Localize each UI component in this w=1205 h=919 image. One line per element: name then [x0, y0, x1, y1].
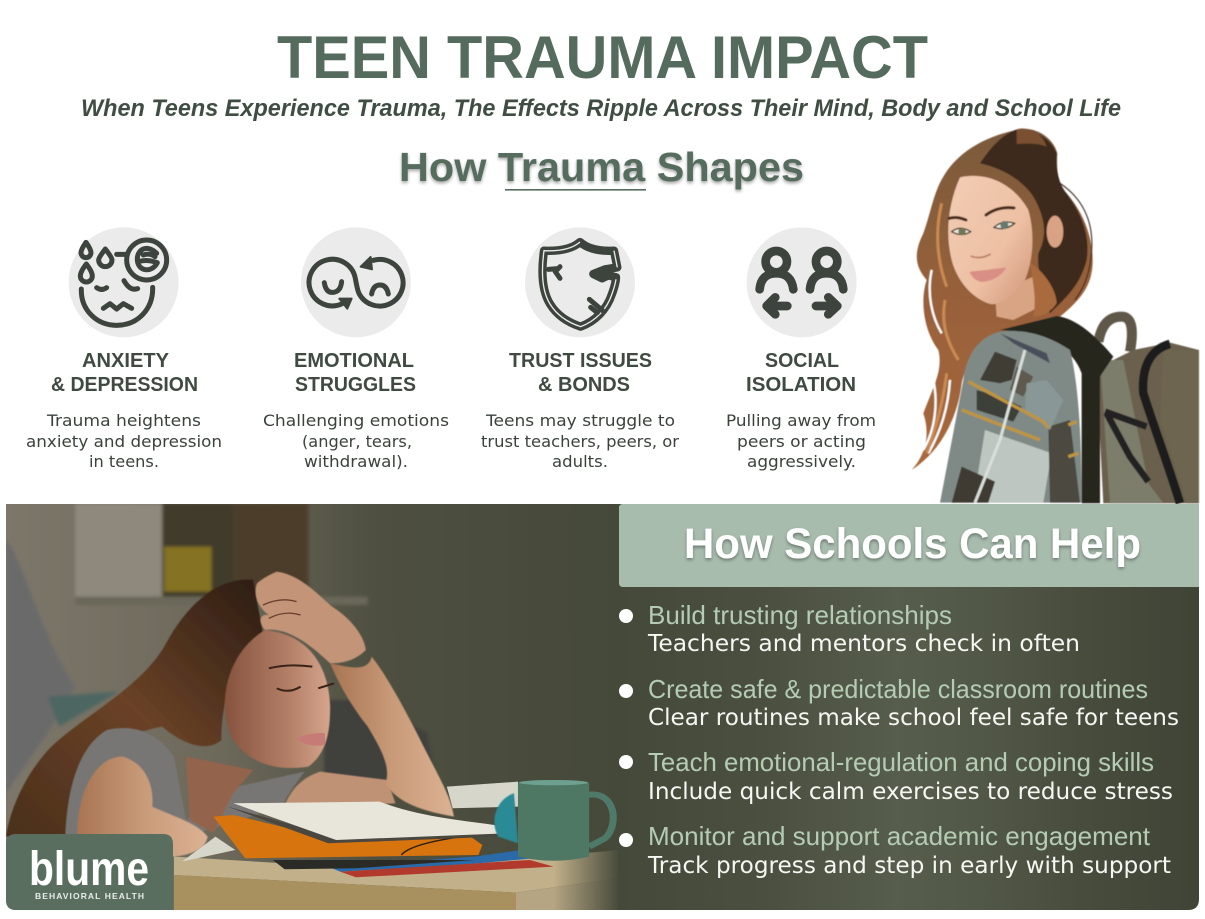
description: Trauma heightens [46, 411, 201, 430]
front hair strands [1030, 263, 1057, 317]
back hair [912, 129, 1093, 470]
icon: anxious face [69, 227, 179, 337]
panel: anxiety and depression [26, 227, 222, 471]
far arm [285, 772, 395, 807]
description: trust teachers, peers, or [481, 432, 679, 451]
panel: social isolation [726, 227, 876, 471]
room background [6, 503, 435, 793]
label: STRUGGLES [295, 374, 416, 396]
list item: academic engagement [619, 821, 1171, 879]
mug [518, 780, 613, 861]
label [294, 350, 416, 396]
list item: coping skills: Teach emotional-regulation and coping skills [648, 747, 1154, 777]
description: Pulling away from [726, 411, 876, 430]
description: (anger, tears, [302, 432, 412, 451]
list item: classroom routines: Clear routines make school feel safe for teens [648, 705, 1179, 731]
logo: blume behavioral health [6, 834, 173, 910]
description: adults. [552, 452, 608, 471]
heading: how trauma shapes: How Trauma Shapes [399, 144, 804, 190]
description: Challenging emotions [263, 411, 449, 430]
label [51, 350, 198, 396]
list item: academic engagement: Track progress and step in early with support [647, 853, 1171, 879]
backpack handle [1098, 317, 1132, 352]
neck [995, 277, 1040, 320]
neck and chest [186, 757, 253, 833]
heading band [619, 504, 1199, 587]
table [174, 850, 620, 893]
orange folder [214, 815, 482, 858]
t-shirt [65, 728, 304, 837]
panel: how schools can help [618, 504, 1199, 910]
icon: cracked shield [525, 227, 635, 337]
list item: coping skills: Include quick calm exercises to reduce stress [648, 779, 1173, 805]
hand [256, 572, 366, 663]
back arm [77, 757, 208, 857]
description: aggressively. [747, 452, 856, 471]
description [26, 411, 222, 471]
label: TRUST ISSUES [509, 350, 652, 372]
teal pouch [494, 793, 518, 843]
label: ISOLATION [746, 374, 856, 396]
list item: coping skills [619, 747, 1173, 805]
list item: trusting relationships: Build trusting relationships [648, 600, 952, 630]
list item: classroom routines: Create safe & predictable classroom routines [648, 674, 1148, 704]
label [746, 350, 856, 396]
description: withdrawal). [304, 452, 408, 471]
label: SOCIAL [765, 350, 839, 372]
raised forearm [330, 657, 454, 817]
description [481, 411, 679, 471]
plaid shirt [940, 331, 1082, 503]
list item: trusting relationships: Teachers and mentors check in often [647, 631, 1080, 657]
label: & BONDS [538, 374, 630, 396]
hair [6, 580, 263, 837]
panel: trust issues and bonds [481, 227, 679, 471]
description: in teens. [89, 452, 159, 471]
hair strand highlights [923, 270, 950, 453]
backpack [1097, 343, 1199, 503]
description [263, 411, 449, 471]
label: ANXIETY [82, 350, 170, 372]
label [509, 350, 652, 396]
heading band: How Schools Can Help [684, 520, 1141, 568]
description: peers or acting [737, 432, 866, 451]
dark strap [1000, 316, 1113, 503]
label: EMOTIONAL [294, 350, 414, 372]
description: anxiety and depression [26, 432, 222, 451]
subtitle: When Teens Experience Trauma, The Effects Ripple Across Their Mind, Body and School Life [81, 95, 1121, 122]
title: TEEN TRAUMA IMPACT [277, 24, 928, 91]
list item: trusting relationships [619, 600, 1080, 657]
description: Teens may struggle to [485, 411, 675, 430]
red and blue folders [340, 860, 554, 877]
brows eyes nose lips [949, 208, 1014, 220]
logo: blume behavioral health: blume [29, 843, 149, 896]
icon: infinity mood loop [301, 227, 411, 337]
loose papers [182, 782, 518, 862]
table fade into panel [558, 850, 618, 910]
face [225, 630, 330, 768]
notebook [227, 807, 498, 843]
photo: stressed student at desk [6, 503, 626, 913]
face [948, 176, 1032, 304]
panel: emotional struggles [263, 227, 449, 471]
label: & DEPRESSION [51, 374, 198, 396]
logo: blume behavioral health: BEHAVIORAL HEALTH [35, 891, 144, 901]
description [726, 411, 876, 471]
icon: two people moving apart [747, 227, 857, 337]
illustration: teen girl with backpack [912, 129, 1199, 503]
list item: classroom routines [619, 674, 1179, 731]
list item: academic engagement: Monitor and support academic engagement [648, 821, 1151, 851]
